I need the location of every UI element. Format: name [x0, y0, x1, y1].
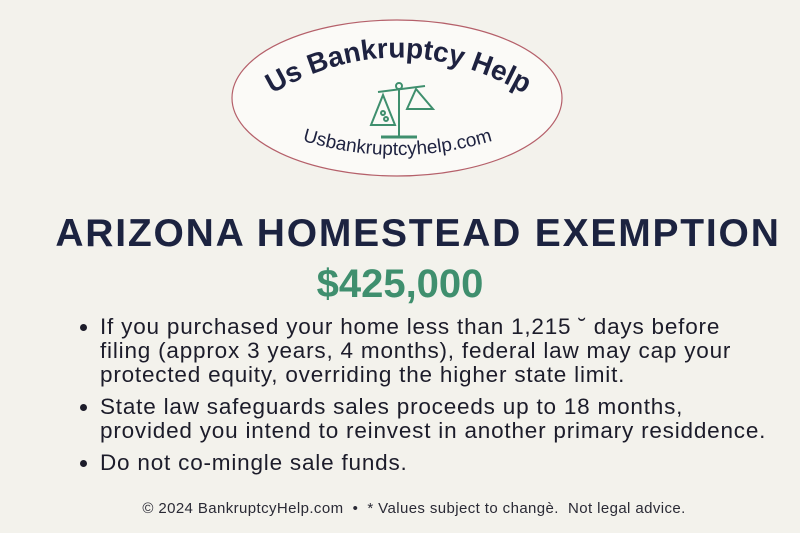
logo: url: Usbankruptcyhelp.com [304, 128, 492, 159]
icon: scales [371, 83, 433, 137]
bullets: protected equity, overriding the higher state limit. [100, 362, 625, 387]
bullets [80, 314, 766, 475]
footer: © 2024 BankruptcyHelp.com • * Values subject to changè. Not legal advice. [142, 500, 686, 517]
bullets: provided you intend to reinvest in another primary residdence. [100, 418, 766, 443]
bullets: Do not co-mingle sale funds. [100, 450, 408, 475]
bullets: If you purchased your home less than 1,215 ˘ days before [100, 314, 720, 339]
bullets: filing (approx 3 years, 4 months), federal law may cap your [100, 338, 731, 363]
logo: top text: Us Bankruptcy Help [264, 39, 529, 94]
logo: ellipse [232, 20, 562, 176]
amount: $425,000 [317, 262, 483, 306]
title: ARIZONA HOMESTEAD EXEMPTION [55, 212, 781, 255]
logo [231, 19, 563, 177]
bullets: State law safeguards sales proceeds up to 18 months, [100, 394, 683, 419]
